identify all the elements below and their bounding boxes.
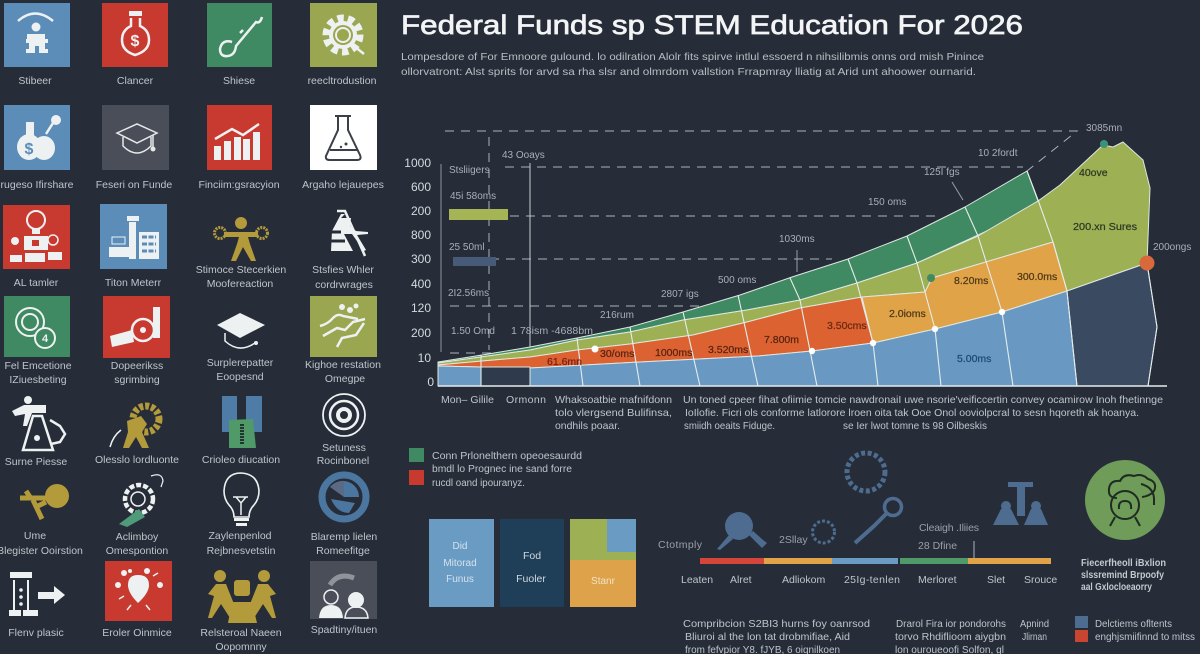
timeline labels: Alret bbox=[730, 574, 752, 586]
y axis labels: 1000 bbox=[404, 156, 431, 170]
block: Mitorad Funus bbox=[429, 519, 494, 607]
panel: funding blocks bbox=[429, 519, 636, 607]
label: Dopeerikss: Dopeerikss bbox=[111, 360, 163, 372]
label: Argaho lejauepes: Argaho lejauepes bbox=[302, 179, 384, 191]
timeline labels: 2Sllay bbox=[779, 534, 808, 546]
label: Dopeerikss: sgrimbing bbox=[114, 374, 160, 386]
footer text left: Compribcion S2BI3 hurns foy oanrsod bbox=[683, 619, 870, 630]
icon: concentric target bbox=[323, 394, 365, 436]
icon: white figure and flask bbox=[12, 396, 65, 450]
icon: olive tile runners bbox=[310, 296, 377, 357]
icon: magnifier bbox=[855, 498, 902, 543]
label: Relsteroal Naeen: Oopomnny bbox=[215, 641, 267, 653]
icon: large gear bbox=[847, 453, 885, 491]
panel: area chart bbox=[404, 123, 1191, 389]
data point dots bbox=[592, 140, 1154, 354]
label: Stsfies Whler: Stsfies Whler bbox=[312, 264, 374, 276]
label: Finciim:gsracyion: Finciim:gsracyion bbox=[198, 179, 280, 191]
y axis labels: 0 bbox=[427, 375, 434, 389]
y axis labels: 800 bbox=[411, 228, 431, 242]
chart value labels: 61.6mn bbox=[547, 356, 582, 368]
label: Stimoce Stecerkien: Moofereaction bbox=[207, 278, 273, 290]
label: Surplerepatter: Eoopesnd bbox=[216, 371, 264, 383]
y axis labels: 400 bbox=[411, 277, 431, 291]
label: Fel Emcetione: Fel Emcetione bbox=[4, 360, 72, 372]
icon: green circle badge bbox=[1085, 460, 1165, 540]
legend: green and red: Conn Prlonelthern opeoesaurdd bbox=[432, 451, 582, 462]
icon: blue pie ring bbox=[322, 475, 366, 519]
panel: timeline with tool icons bbox=[658, 453, 1057, 586]
label: Aclimboy: Aclimboy bbox=[116, 531, 159, 543]
left mini bars bbox=[449, 209, 508, 266]
block: Fod Fuoler: Fod bbox=[523, 550, 541, 562]
icon: white cone and ladder bbox=[325, 211, 368, 256]
chart value labels: 25 50ml bbox=[449, 242, 485, 253]
chart value labels bbox=[448, 123, 1191, 368]
chart value labels: 45i 58oms bbox=[450, 191, 496, 202]
label: Blaremp lielen: Romeefitge bbox=[316, 545, 370, 557]
label: Surne Piesse: Surne Piesse bbox=[5, 456, 67, 468]
chart value labels: 216rum bbox=[600, 310, 634, 321]
chart value labels: 125I fgs bbox=[924, 167, 960, 178]
segment dividers and baseline bbox=[438, 171, 1167, 386]
badge caption: aal Gxlocloeaorry bbox=[1081, 582, 1152, 593]
icon: red tile money bag bbox=[102, 3, 168, 67]
timeline labels: Leaten bbox=[681, 574, 713, 586]
chart value labels: 3.50cms bbox=[827, 320, 867, 332]
chart value labels: 43 Ooays bbox=[502, 150, 545, 161]
icon: blue tile money bags: $ bbox=[25, 141, 34, 158]
label: Ume: Ume bbox=[24, 530, 46, 542]
label: Setuness: Setuness bbox=[322, 442, 366, 454]
icon: white tile flask bbox=[310, 105, 377, 170]
block: Mitorad Funus: Funus bbox=[446, 574, 474, 585]
chart value labels: 1 78ism -4688bm bbox=[511, 326, 593, 337]
label: Blaremp lielen: Blaremp lielen bbox=[311, 531, 377, 543]
badge caption bbox=[1081, 558, 1166, 593]
label: Stsfies Whler: cordrwrages bbox=[315, 279, 373, 291]
label: Crioleo diucation: Crioleo diucation bbox=[202, 454, 280, 466]
legend: green and red: rucdl oand ipouranyz. bbox=[432, 478, 525, 489]
timeline labels: Adliokom bbox=[782, 574, 825, 586]
label: Zaylenpenlod: Zaylenpenlod bbox=[208, 530, 272, 542]
icon: gold figure with gears bbox=[214, 217, 268, 261]
icon: green tile concentric rings: 4 bbox=[42, 333, 49, 345]
footer text right: torvo Rhdiflioom aiygbn bbox=[895, 632, 1006, 643]
legend: green and red bbox=[409, 448, 582, 489]
label: Titon Meterr: Titon Meterr bbox=[105, 277, 162, 289]
timeline labels: 28 Dfine bbox=[918, 540, 957, 552]
label: Kighoe restation: Omegpe bbox=[325, 373, 365, 385]
label: Spadtiny/ituen: Spadtiny/ituen bbox=[311, 624, 377, 636]
legend: blue and red: enghjsmiifinnd to mitss bbox=[1095, 632, 1195, 643]
block: Mitorad Funus: Mitorad bbox=[443, 558, 477, 569]
area layers bbox=[438, 142, 1157, 386]
icon: grey tile people bbox=[310, 561, 377, 619]
title: Federal Funds sp STEM Education For 2026 bbox=[401, 10, 1023, 40]
footer text right: Jlirnan bbox=[1022, 632, 1047, 643]
icon: olive tile gear bbox=[310, 3, 377, 67]
block: Fod Fuoler: Fuoler bbox=[516, 573, 546, 585]
label: Shiese: Shiese bbox=[223, 75, 255, 87]
block: Stanr treemap bbox=[570, 519, 636, 607]
below-chart captions bbox=[441, 394, 1163, 432]
label: rugeso Ifirshare: rugeso Ifirshare bbox=[1, 179, 74, 191]
block: Fod Fuoler bbox=[500, 519, 564, 607]
label: Stimoce Stecerkien: Stimoce Stecerkien bbox=[196, 264, 286, 276]
y axis labels: 200 bbox=[411, 204, 431, 218]
chart value labels: 1030ms bbox=[779, 234, 815, 245]
timeline bar bbox=[700, 541, 1051, 564]
label: Setuness: Rocinbonel bbox=[317, 455, 369, 467]
label: Surplerepatter: Surplerepatter bbox=[207, 357, 274, 369]
legend: blue and red: Delctiems ofltents bbox=[1095, 619, 1172, 630]
timeline labels: Merloret bbox=[918, 574, 957, 586]
label: Aclimboy: Omespontion bbox=[106, 545, 168, 557]
icon: circle with tongs bbox=[717, 512, 767, 550]
chart value labels: 300.0ms bbox=[1017, 271, 1057, 283]
icon: blue tile Stibeer bbox=[4, 3, 70, 67]
icon: blue tile buildings bbox=[100, 204, 167, 269]
timeline labels: Cleaigh .Iliies bbox=[919, 522, 979, 534]
icon: blue tile money bags bbox=[4, 105, 70, 170]
chart value labels: 200ongs bbox=[1153, 242, 1191, 253]
chart value labels: 7.800m bbox=[764, 334, 799, 346]
label: Kighoe restation: Kighoe restation bbox=[305, 359, 381, 371]
chart gridlines and axis bbox=[441, 131, 1077, 386]
icon: red tile rising bars bbox=[207, 105, 272, 170]
timeline labels: 25Ig-tenlen bbox=[844, 574, 900, 586]
label: Feseri on Funde: Feseri on Funde bbox=[96, 179, 172, 191]
panel: icon grid bbox=[0, 3, 384, 653]
footer text left: Bliuroi al the lon tat drobmifiae, Aid bbox=[685, 632, 850, 643]
chart value labels: 2I2.56ms bbox=[448, 288, 489, 299]
y axis labels: 10 bbox=[418, 351, 431, 365]
below-chart captions: tolo vlergsend Bulifinsa, bbox=[555, 407, 672, 419]
below-chart captions: Ormonn bbox=[506, 394, 546, 406]
subtitle text block bbox=[401, 51, 984, 78]
icon: T and two figures bbox=[993, 482, 1048, 525]
timeline labels: Ctotmply bbox=[658, 539, 703, 551]
below-chart captions: ondhils poaar. bbox=[555, 420, 620, 432]
icon: gold group of people bbox=[208, 570, 276, 623]
icon: red tile ticket bbox=[103, 296, 170, 358]
below-chart captions: Un toned cpeer fihat ofiimie tomcie nawdronaiI uwe nsorie'veificcertin convey ocamirow Inoh fhetinnge bbox=[683, 394, 1163, 406]
legend: blue and red bbox=[1075, 616, 1195, 643]
icon: red tile money bag: $ bbox=[131, 33, 140, 50]
icon: green tile tool bbox=[207, 3, 272, 67]
icon: white flow diagram bbox=[9, 572, 65, 616]
label: reecltrodustion: reecltrodustion bbox=[308, 75, 377, 87]
below-chart captions: IoIlofie. Ficri ols conforme latlorore lroen oita tak Ooe Onol ooviolpcral to sesn hqoreth ak hoanya. bbox=[685, 407, 1139, 419]
label: Olesslo lordluonte: Olesslo lordluonte bbox=[95, 454, 179, 466]
badge caption: slssremind Brpoofy bbox=[1081, 570, 1164, 581]
footer text right: Apnind bbox=[1020, 619, 1049, 630]
label: Stibeer: Stibeer bbox=[18, 75, 52, 87]
badge caption: Fiecerfheoll iBxlion bbox=[1081, 558, 1166, 569]
chart value labels: 150 oms bbox=[868, 197, 906, 208]
chart value labels: 30/oms bbox=[600, 348, 634, 360]
chart value labels: 40ove bbox=[1079, 167, 1108, 179]
icon: gold gear figure bbox=[110, 406, 159, 448]
timeline labels: Srouce bbox=[1024, 574, 1057, 586]
y axis labels bbox=[404, 156, 434, 389]
subtitle text block: ollorvatront: Alst sprits for arvd sa rha slsr and olmrdom vallstion Frrapmray lliatig at Arid unt ahoower ournarid. bbox=[401, 66, 976, 78]
icon: green tile concentric rings bbox=[4, 296, 70, 357]
icon: white graduation cap bbox=[217, 313, 265, 348]
below-chart captions: Whaksoatbie mafnifdonn bbox=[555, 394, 672, 406]
y axis labels: 200 bbox=[411, 326, 431, 340]
block: Mitorad Funus: Did bbox=[452, 541, 468, 552]
y axis labels: 600 bbox=[411, 180, 431, 194]
label: Eroler Oinmice: Eroler Oinmice bbox=[102, 627, 172, 639]
icon: small gear bbox=[812, 521, 834, 543]
chart value labels: 200.xn Sures bbox=[1073, 221, 1137, 233]
chart value labels: 5.00ms bbox=[957, 353, 991, 365]
icon: gold branch bbox=[20, 484, 69, 519]
icon: red tile bulb and pin bbox=[105, 561, 172, 621]
label: Clancer: Clancer bbox=[117, 75, 154, 87]
icon: red tile bulbs bbox=[3, 205, 70, 269]
label: Relsteroal Naeen: Relsteroal Naeen bbox=[200, 627, 282, 639]
chart value labels: 1.50 Omd bbox=[451, 326, 495, 337]
label: AL tamler: AL tamler bbox=[14, 277, 59, 289]
below-chart captions: Mon– Gilile bbox=[441, 394, 494, 406]
icon: grey tile graduation cap bbox=[102, 105, 169, 170]
chart value labels: 500 oms bbox=[718, 275, 756, 286]
icon: gear and green arrow bbox=[119, 475, 163, 527]
icon: buildings with green block bbox=[222, 396, 262, 448]
below-chart captions: smiidh oeaits Fiduge. bbox=[684, 420, 775, 432]
subtitle text block: Lompesdore of For Emnoore gulound. lo odilration Alolr fits spirve intlul essoerd n nihsilibmis onns ord mish Pinince bbox=[401, 51, 984, 63]
block: Stanr treemap: Stanr bbox=[591, 576, 616, 587]
label: Fel Emcetione: IZiuesbeting bbox=[9, 374, 67, 386]
chart value labels: 8.20ms bbox=[954, 275, 988, 287]
chart value labels: 2807 igs bbox=[661, 289, 699, 300]
chart value labels: 3.520ms bbox=[708, 344, 748, 356]
chart value labels: 10 2fordt bbox=[978, 148, 1018, 159]
footer text right: Drarol Fira ior pondorohs bbox=[896, 619, 1006, 630]
chart value labels: 2.0ioms bbox=[889, 308, 926, 320]
footer text left bbox=[683, 619, 870, 654]
below-chart captions: se Ier lwot tomne ts 98 Oilbeskis bbox=[843, 420, 987, 432]
y axis labels: 300 bbox=[411, 252, 431, 266]
label: Zaylenpenlod: Rejbnesvetstin bbox=[207, 545, 276, 557]
label: Flenv plasic: Flenv plasic bbox=[8, 627, 64, 639]
icon: light bulb bbox=[224, 473, 259, 526]
timeline labels bbox=[658, 522, 1057, 586]
footer text right bbox=[895, 619, 1049, 654]
chart value labels: 3085mn bbox=[1086, 123, 1122, 134]
timeline labels: Slet bbox=[987, 574, 1005, 586]
y axis labels: 120 bbox=[411, 301, 431, 315]
chart value labels: 1000ms bbox=[655, 347, 692, 359]
legend: green and red: bmdl lo Prognec ine sand forre bbox=[432, 464, 572, 475]
chart value labels: Stsliigers bbox=[449, 165, 490, 176]
